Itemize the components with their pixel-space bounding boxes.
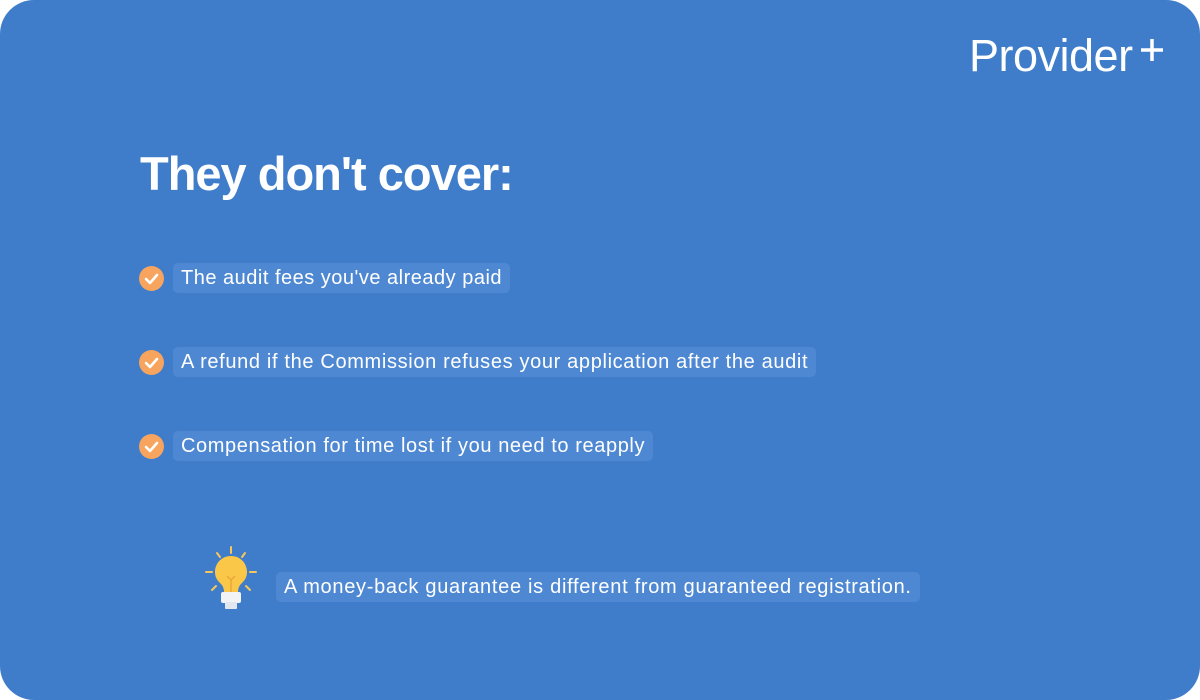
- list item 1: [139, 263, 510, 293]
- text: callout: A money-back guarantee is different from guaranteed registration.: [284, 576, 912, 598]
- list item 3: [139, 431, 653, 461]
- title: They don't cover:: [140, 147, 513, 200]
- list item 2: [139, 347, 816, 377]
- callout: [205, 546, 920, 609]
- text: item 1: [173, 263, 510, 293]
- icon: check: [139, 266, 164, 291]
- logo: Provider: [969, 30, 1133, 81]
- text: item 2: A refund if the Commission refuses your application after the audit: [181, 351, 808, 373]
- icon: check: [139, 350, 164, 375]
- icon: check: [139, 434, 164, 459]
- text: item 3: Compensation for time lost if you need to reapply: [181, 435, 645, 457]
- icon: light bulb: [205, 546, 257, 609]
- text: item 1: The audit fees you've already paid: [181, 267, 502, 289]
